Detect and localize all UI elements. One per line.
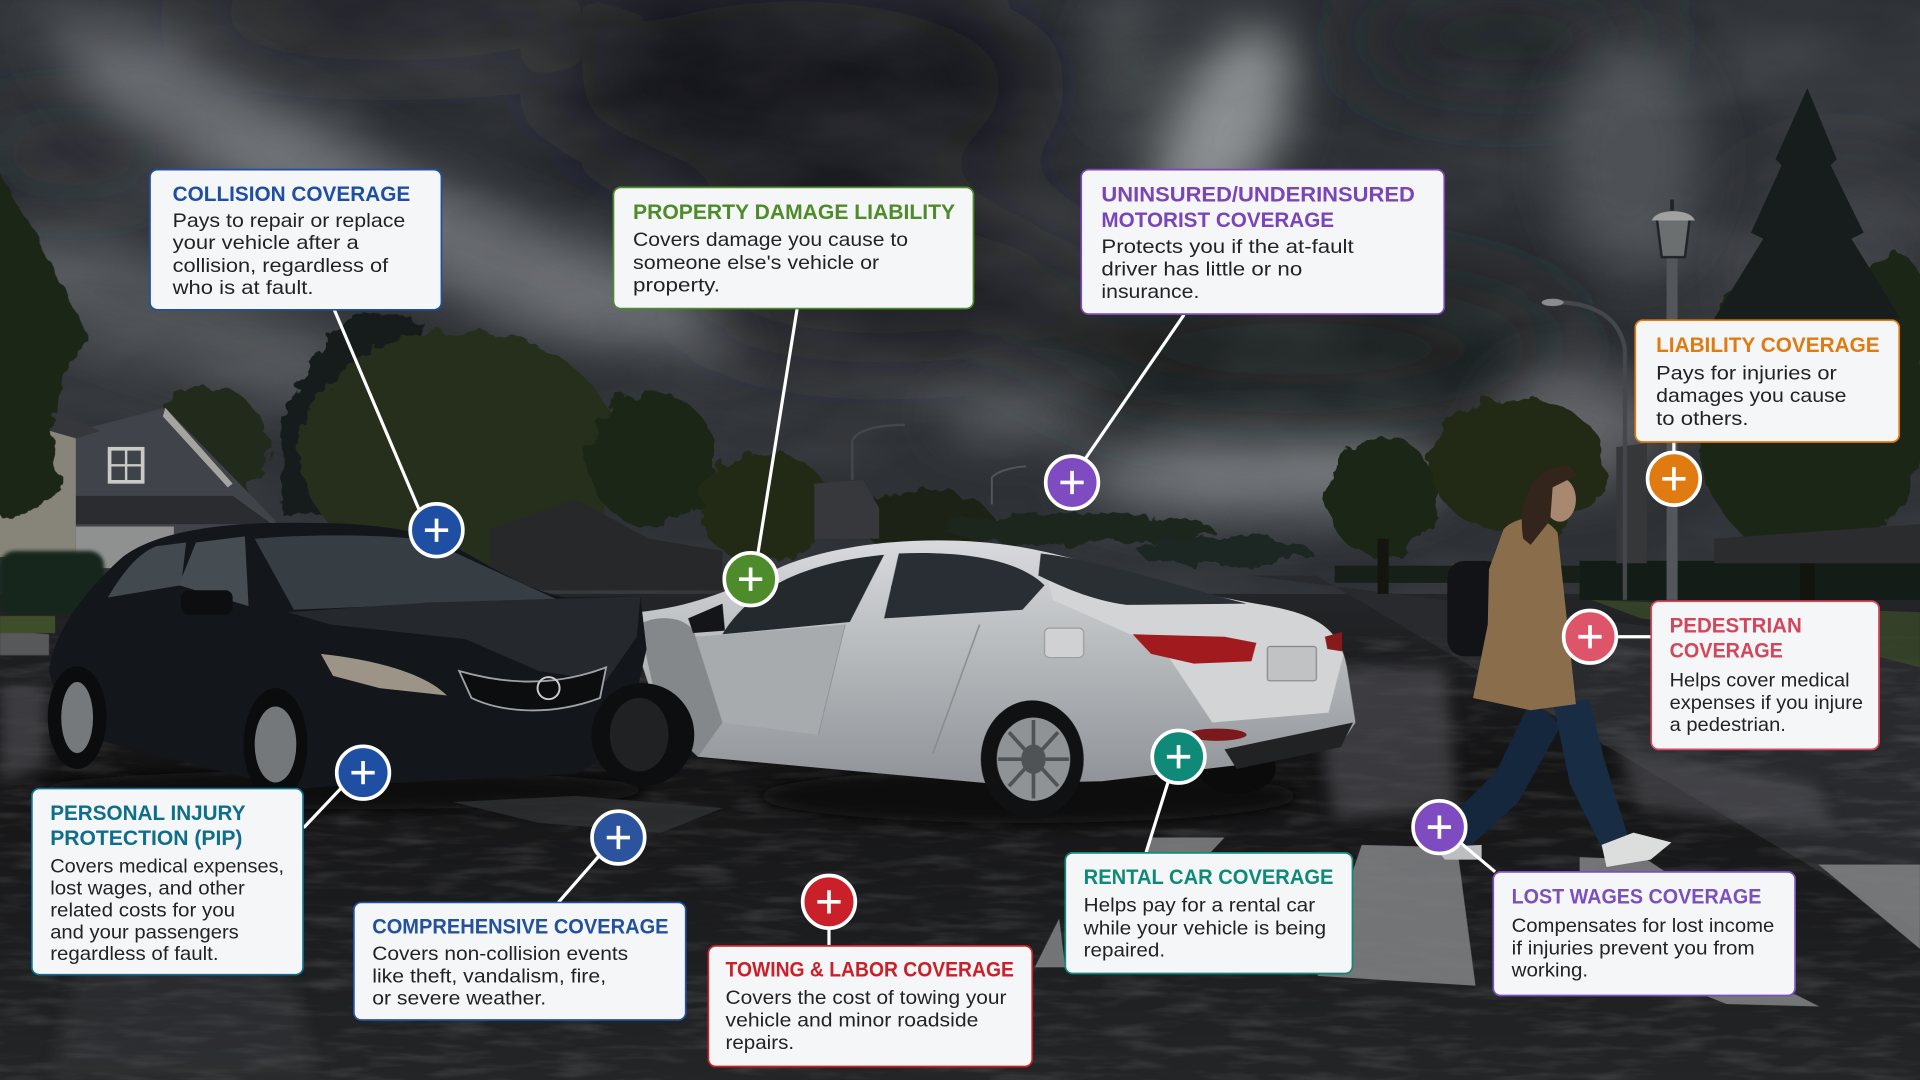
text: pip description: regardless of fault. [50, 944, 219, 965]
marker: liability [1648, 452, 1700, 505]
heading: personal injury protection [50, 802, 246, 850]
text: pip description: Covers medical expenses, [50, 856, 284, 877]
text: property description [633, 230, 908, 296]
text: pip description [50, 856, 284, 965]
text: rental description: Helps pay for a rental car [1084, 896, 1315, 917]
text: collision description [171, 211, 405, 299]
heading: property damage liability: PROPERTY DAMAGE LIABILITY [633, 201, 955, 224]
heading: uninsured motorist coverage: UNINSURED/UNDERINSURED [1101, 183, 1415, 206]
marker: collision [410, 504, 463, 557]
marker: personal injury [337, 746, 389, 799]
background: houses [0, 389, 1920, 633]
text: lost wages description: Compensates for lost income [1512, 916, 1774, 937]
text: property description: someone else's vehicle or [633, 253, 879, 274]
heading: pedestrian coverage: PEDESTRIAN [1670, 614, 1802, 637]
heading: comprehensive coverage: COMPREHENSIVE COVERAGE [372, 916, 669, 939]
panel: liability coverage [1635, 320, 1899, 442]
background: trees and hedges [149, 88, 1920, 667]
background: road [0, 576, 1920, 1080]
text: uninsured description [1101, 237, 1355, 303]
leader lines [304, 309, 1674, 945]
text: collision description: collision, regardless of [173, 256, 389, 277]
text: property description: Covers damage you cause to [633, 230, 908, 251]
text: pedestrian description: a pedestrian. [1670, 715, 1786, 736]
text: comprehensive description: Covers non-collision events [372, 944, 628, 965]
text: towing description: repairs. [726, 1033, 794, 1054]
text: collision description: Pays to repair or replace [173, 211, 405, 232]
illustration: pedestrian [1435, 466, 1671, 867]
text: collision description: your vehicle after a [173, 233, 359, 254]
heading: personal injury protection: PROTECTION (PIP) [50, 827, 242, 850]
background: storm sky [0, 0, 1920, 686]
text: comprehensive description: like theft, vandalism, fire, [372, 967, 606, 988]
text: towing description [726, 988, 1007, 1054]
background: left foreground tree [0, 153, 88, 514]
heading: rental car coverage: RENTAL CAR COVERAGE [1084, 866, 1334, 889]
text: pip description: and your passengers [50, 923, 239, 944]
text: lost wages description [1511, 916, 1774, 982]
text: uninsured description: driver has little or no [1101, 260, 1302, 281]
text: lost wages description: if injuries prevent you from [1512, 938, 1755, 959]
illustration: black car [37, 523, 722, 833]
heading: towing and labor coverage: TOWING & LABOR COVERAGE [726, 959, 1014, 982]
heading: uninsured motorist coverage: MOTORIST COVERAGE [1101, 209, 1334, 232]
text: rental description: while your vehicle is being [1083, 918, 1326, 939]
heading: uninsured motorist coverage [1101, 183, 1415, 232]
illustration: silver car [637, 540, 1356, 823]
heading: pedestrian coverage [1670, 614, 1802, 663]
heading: personal injury protection: PERSONAL INJURY [50, 802, 246, 825]
text: pedestrian description: expenses if you injure [1670, 693, 1863, 714]
marker: towing [803, 876, 855, 928]
panel: uninsured motorist coverage [1081, 170, 1444, 314]
text: property description: property. [633, 275, 720, 296]
panel: collision coverage [150, 170, 441, 310]
heading: liability coverage: LIABILITY COVERAGE [1656, 334, 1880, 357]
text: liability description [1656, 364, 1847, 430]
background: crosswalk stripes [1035, 838, 1920, 1007]
background: street lamps [852, 200, 1695, 600]
panel: pedestrian coverage [1651, 601, 1879, 749]
marker: comprehensive [592, 811, 645, 864]
text: pedestrian description: Helps cover medical [1670, 670, 1850, 691]
heading: pedestrian coverage: COVERAGE [1670, 640, 1783, 663]
text: collision description: who is at fault. [171, 278, 313, 299]
text: liability description: to others. [1656, 409, 1749, 430]
marker: uninsured motorist [1046, 456, 1098, 509]
marker: pedestrian [1564, 610, 1616, 663]
text: pip description: lost wages, and other [50, 878, 245, 899]
text: lost wages description: working. [1511, 961, 1588, 982]
text: liability description: Pays for injuries or [1656, 364, 1837, 385]
panel: comprehensive coverage [354, 902, 686, 1020]
text: comprehensive description [372, 944, 628, 1010]
text: pip description: related costs for you [50, 901, 235, 922]
text: towing description: Covers the cost of towing your [726, 988, 1007, 1009]
heading: lost wages coverage: LOST WAGES COVERAGE [1512, 886, 1762, 909]
text: uninsured description: insurance. [1101, 282, 1199, 303]
text: rental description [1083, 896, 1326, 961]
panel: rental car coverage [1065, 853, 1352, 973]
text: towing description: vehicle and minor roadside [726, 1011, 978, 1032]
panel: towing and labor coverage [708, 946, 1032, 1067]
text: liability description: damages you cause [1656, 386, 1847, 407]
heading: collision coverage: COLLISION COVERAGE [173, 183, 410, 206]
panel: lost wages coverage [1493, 872, 1795, 996]
text: rental description: repaired. [1084, 940, 1165, 961]
text: comprehensive description: or severe weather. [372, 989, 546, 1010]
marker: property damage [724, 553, 777, 606]
text: uninsured description: Protects you if the at-fault [1101, 237, 1355, 258]
marker: lost wages [1413, 801, 1466, 853]
panel: property damage liability [613, 187, 973, 309]
text: pedestrian description [1670, 670, 1863, 736]
marker: rental car [1152, 730, 1205, 783]
panel: personal injury protection [32, 789, 303, 975]
